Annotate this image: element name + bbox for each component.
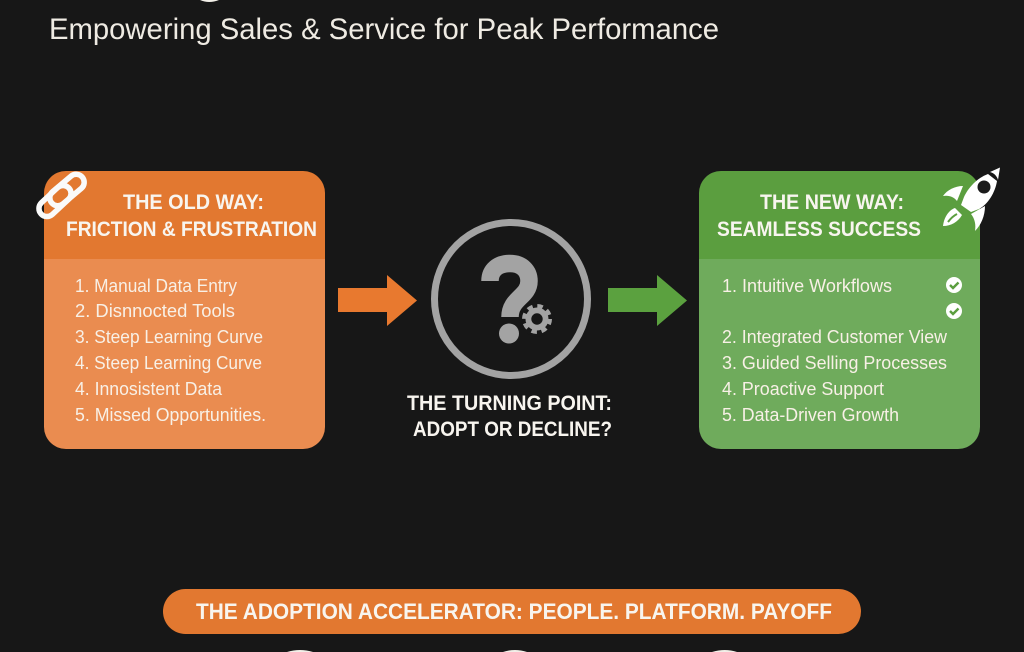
panel background [44, 259, 325, 449]
panel header [699, 171, 980, 259]
list: new way benefits: 4. Proactive Support [722, 378, 885, 399]
icon: check mark two [946, 303, 962, 319]
turning point icon [434, 222, 588, 376]
list: old way problems: 1. Manual Data Entry [75, 275, 238, 296]
panel header: THE OLD WAY: [123, 190, 264, 214]
list: new way benefits: 2. Integrated Customer View [722, 326, 947, 347]
icon: gear [520, 302, 554, 336]
banner: adoption accelerator: THE ADOPTION ACCELERATOR: PEOPLE. PLATFORM. PAYOFF [196, 599, 832, 624]
icon: question mark [490, 264, 529, 344]
list: old way problems: 4. Innosistent Data [75, 378, 223, 399]
list: new way benefits [722, 275, 947, 425]
panel: the new way [699, 168, 1000, 449]
title: Empowering Sales & Service for Peak Performance [49, 13, 719, 46]
list: new way benefits: 1. Intuitive Workflows [722, 275, 892, 296]
turning point caption: ADOPT OR DECLINE? [413, 417, 612, 441]
list: old way problems: 3. Steep Learning Curve [75, 326, 263, 347]
panel background [699, 259, 980, 449]
list: new way benefits: 3. Guided Selling Processes [722, 352, 947, 373]
list: old way problems: 2. Disnnocted Tools [75, 300, 235, 321]
cropped bottom icons [287, 650, 737, 652]
panel header: FRICTION & FRUSTRATION [66, 217, 317, 241]
panel: the old way [36, 171, 325, 449]
banner: adoption accelerator [163, 589, 861, 634]
list: old way problems [75, 275, 266, 425]
icon: rocket [943, 168, 1000, 231]
cropped top icon [200, 0, 219, 2]
icon: check mark one [946, 277, 962, 293]
list: old way problems: 5. Missed Opportunities. [75, 404, 266, 425]
list: new way benefits: 5. Data-Driven Growth [722, 404, 899, 425]
arrow: orange [338, 275, 417, 326]
arrow: green [608, 275, 687, 326]
list: old way problems: 4. Steep Learning Curve [75, 352, 262, 373]
panel header [44, 171, 325, 259]
turning point caption [407, 391, 612, 441]
panel header: SEAMLESS SUCCESS [717, 217, 921, 241]
panel header: THE NEW WAY: [760, 190, 904, 214]
ring [434, 222, 588, 376]
turning point caption: THE TURNING POINT: [407, 391, 612, 415]
icon: chain [36, 171, 87, 220]
